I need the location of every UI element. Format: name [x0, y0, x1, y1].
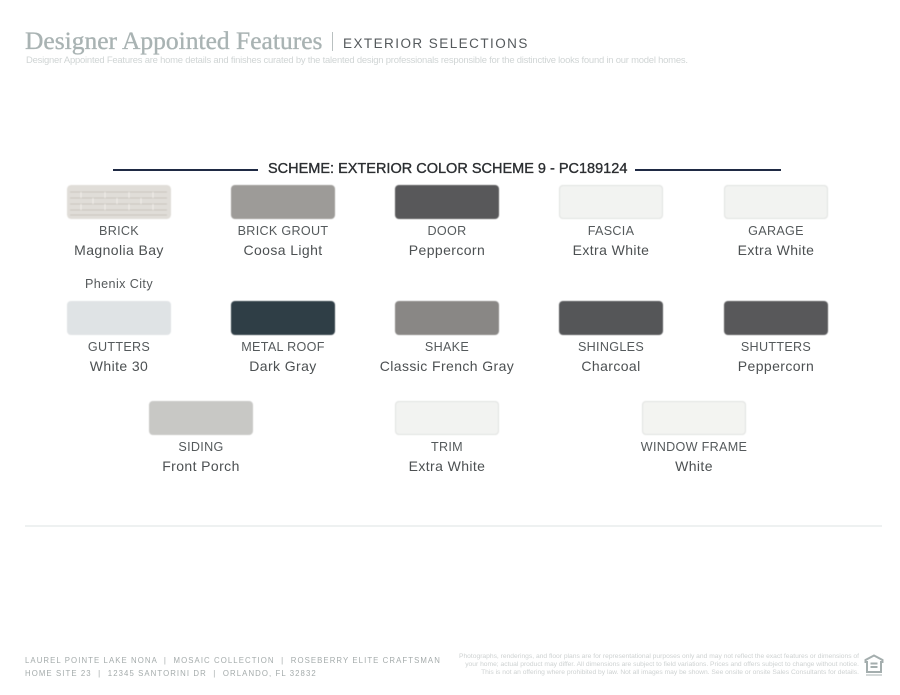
swatch: metal roof [230, 300, 336, 374]
icon: equal housing [864, 654, 884, 676]
swatch: gutters: White 30 [90, 358, 148, 374]
swatch: shingles [558, 300, 664, 374]
swatch: door [394, 184, 500, 258]
swatch: garage: Extra White [738, 242, 814, 258]
swatch: garage [724, 184, 828, 258]
swatch: metal roof: Dark Gray [249, 358, 317, 374]
title divider [332, 32, 333, 51]
swatch: garage: GARAGE [748, 224, 804, 238]
swatch: fascia [558, 184, 664, 258]
swatch: shake: Classic French Gray [380, 358, 514, 374]
swatch: shake [380, 300, 514, 374]
swatch: door: Peppercorn [409, 242, 485, 258]
swatch: siding: Front Porch [162, 458, 240, 474]
swatch: window frame: WINDOW FRAME [641, 440, 747, 454]
swatch: shutters [723, 300, 829, 374]
scheme heading: SCHEME: EXTERIOR COLOR SCHEME 9 - PC189124 [268, 160, 627, 176]
footer disclaimer: Photographs, renderings, and floor plans are for representational purposes only and may not reflect the exact features or dimensions of [459, 653, 859, 660]
swatch: fascia: Extra White [573, 242, 649, 258]
swatch: brick [66, 184, 172, 258]
swatch: shutters: Peppercorn [738, 358, 814, 374]
swatch: brick grout [230, 184, 336, 258]
swatch: metal roof: METAL ROOF [241, 340, 325, 354]
footer address: LAUREL POINTE LAKE NONA | MOSAIC COLLECTION | ROSEBERRY ELITE CRAFTSMAN [25, 656, 441, 665]
page header [25, 26, 688, 66]
swatch: window frame [640, 400, 747, 474]
swatch: siding [148, 400, 254, 474]
swatch: shingles: SHINGLES [578, 340, 644, 354]
swatch: fascia: FASCIA [588, 224, 634, 238]
swatch: shutters: SHUTTERS [741, 340, 811, 354]
swatch: trim: Extra White [409, 458, 485, 474]
footer disclaimer: This is not an offering where prohibited by law. Not all images may be shown. See onsite or onsite Sales Consultants for details. [481, 669, 859, 676]
swatch: brick grout: Coosa Light [243, 242, 323, 258]
swatch: shake: SHAKE [425, 340, 469, 354]
swatch: shingles: Charcoal [581, 358, 641, 374]
swatch: window frame: White [675, 458, 713, 474]
title: Designer Appointed Features [25, 26, 322, 55]
footer address: HOME SITE 23 | 12345 SANTORINI DR | ORLANDO, FL 32832 [25, 669, 317, 678]
description: Designer Appointed Features are home details and finishes curated by the talented design professionals responsible for the distinctive looks found in our model homes. [26, 55, 688, 66]
text: Phenix City: Phenix City [85, 276, 153, 290]
swatch: door: DOOR [428, 224, 466, 238]
footer disclaimer: your home; actual product may differ. All dimensions are subject to field variations. Prices and offers subject to change without notice. [465, 661, 859, 668]
swatch: trim [394, 400, 500, 474]
swatch: gutters [66, 300, 172, 374]
footer address [25, 656, 441, 678]
subtitle: EXTERIOR SELECTIONS [343, 36, 529, 50]
swatch: gutters: GUTTERS [88, 340, 150, 354]
swatch: brick: BRICK [99, 224, 139, 238]
swatch: trim: TRIM [431, 440, 463, 454]
swatch: brick grout: BRICK GROUT [238, 224, 328, 238]
footer rule [25, 525, 882, 527]
footer disclaimer [459, 653, 859, 676]
swatch: siding: SIDING [178, 440, 224, 454]
swatch: brick: Magnolia Bay [74, 242, 164, 258]
